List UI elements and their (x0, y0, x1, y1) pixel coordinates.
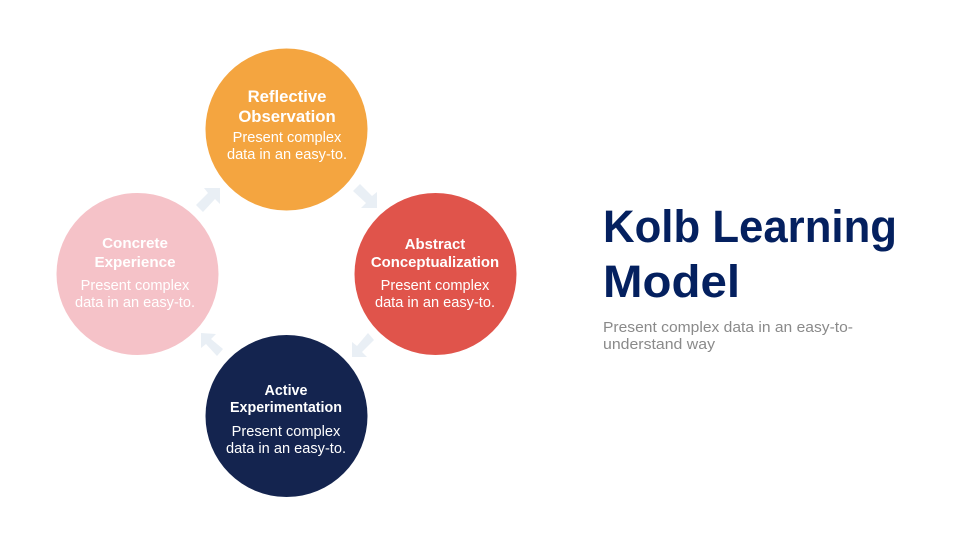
heading: concrete experience: Experience (94, 254, 176, 271)
title: Kolb Learning (603, 201, 897, 252)
arrow: active to concrete (201, 333, 223, 356)
arrow: reflective to abstract (353, 184, 377, 208)
arrow: abstract to active (352, 333, 374, 357)
subtitle: Present complex data in an easy-to- (603, 319, 853, 336)
text: reflective description: Present complex (233, 130, 341, 146)
text: abstract description: data in an easy-to. (375, 295, 495, 311)
text: active description: data in an easy-to. (226, 441, 346, 457)
panel: reflective observation (206, 48, 368, 210)
subtitle (603, 319, 853, 353)
text: abstract description: Present complex (381, 278, 489, 294)
heading: concrete experience: Concrete (102, 235, 168, 252)
heading: reflective observation: Reflective (248, 87, 326, 106)
heading: abstract conceptualization: Conceptualization (371, 255, 499, 271)
text: concrete description: data in an easy-to. (75, 295, 195, 311)
title: Model (603, 256, 740, 307)
text: reflective description: data in an easy-to. (227, 147, 347, 163)
text: active description: Present complex (232, 424, 340, 440)
heading: active experimentation: Active (265, 383, 307, 399)
text: concrete description: Present complex (81, 278, 189, 294)
panel: abstract conceptualization (354, 193, 516, 355)
title (603, 201, 897, 307)
arrow: concrete to reflective (196, 188, 220, 212)
panel: concrete experience (56, 193, 218, 355)
subtitle: understand way (603, 336, 716, 353)
heading: reflective observation: Observation (238, 107, 336, 126)
heading: active experimentation: Experimentation (230, 400, 342, 416)
panel: active experimentation (206, 335, 368, 497)
heading: abstract conceptualization: Abstract (405, 237, 465, 253)
